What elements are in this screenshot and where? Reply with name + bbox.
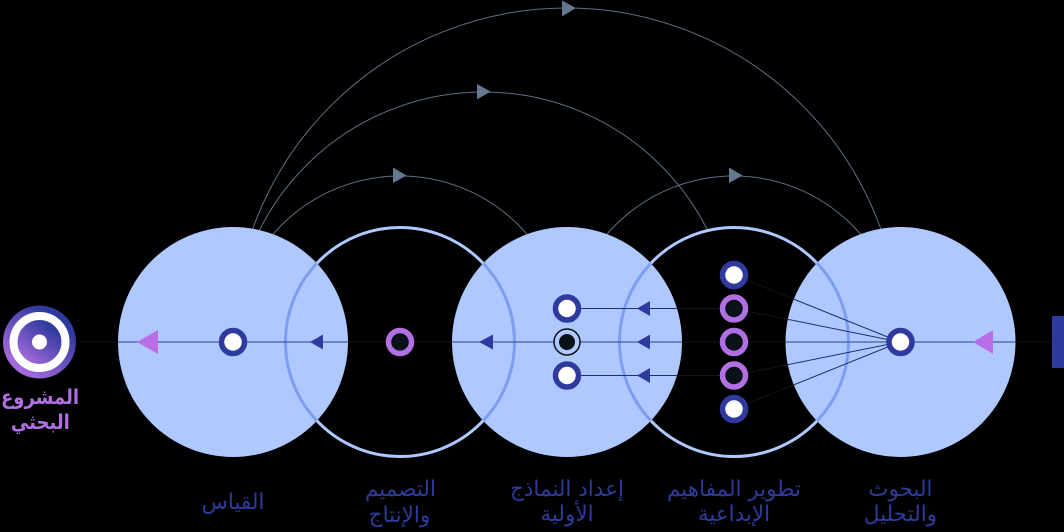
arrow: into design, middle (479, 334, 493, 350)
node: measurement (222, 330, 244, 354)
arrowhead: top arc (562, 0, 576, 16)
label: research and analysis: والتحليل (864, 502, 937, 527)
flow arrows (310, 301, 650, 383)
node: prototype upper (556, 297, 578, 320)
arc: measurement to prototyping (233, 176, 567, 342)
arrowhead: third arc (393, 168, 406, 183)
right end bar (1052, 316, 1064, 368)
icon: research project target (3, 306, 76, 378)
title: research project: البحثي (11, 410, 70, 434)
label: measurement: القياس (202, 490, 264, 515)
label: creative concept development: تطوير المفاهيم (667, 477, 801, 502)
arc: prototyping to research (567, 176, 900, 342)
arrow: upper concept to prototype (637, 301, 650, 316)
node: prototype middle (554, 329, 580, 355)
circle: measurement (118, 227, 348, 457)
label: prototyping: الأولية (540, 500, 594, 527)
node: concept 4 (722, 364, 746, 387)
node: concept 3 (722, 330, 746, 354)
label: design and production: التصميم (365, 477, 436, 502)
arc: measurement to concept development (233, 92, 734, 342)
node: concept 1 (722, 264, 746, 286)
arc: largest, measurement to research (233, 8, 900, 342)
purple arrow: measurement (137, 330, 158, 354)
purple arrow: research (973, 330, 993, 354)
node: prototype lower (556, 364, 578, 387)
label: creative concept development: الإبداعية (698, 502, 770, 527)
arrow: middle concept to prototype (637, 334, 650, 350)
circle: design and production (286, 228, 514, 456)
circle: prototyping (452, 227, 682, 457)
circle: research and analysis (786, 227, 1016, 457)
overlap of outlines inside filled circles (284, 262, 850, 422)
filled stage circles (118, 227, 1016, 457)
feedback arcs (233, 8, 900, 342)
nodes (222, 264, 912, 420)
faint connector lines on black (80, 275, 1052, 409)
label: research and analysis: البحوث (868, 477, 933, 502)
node: concept 2 (722, 297, 746, 320)
arrowhead: fourth arc (729, 168, 742, 183)
node: design (388, 330, 412, 354)
outlined stage circles (286, 228, 848, 456)
title: research project: المشروع (1, 385, 79, 409)
arrow: into measurement (310, 334, 323, 350)
label: design and production: والإنتاج (369, 503, 430, 528)
arrowhead: second arc (477, 84, 490, 100)
connector lines on filled circles (118, 298, 1016, 386)
circle: concept development (620, 228, 848, 456)
arrow: lower concept to prototype (637, 368, 650, 383)
node: concept 5 (722, 398, 746, 420)
label: prototyping: إعداد النماذج (510, 477, 624, 502)
arc arrowheads (393, 0, 742, 183)
node: research (889, 330, 912, 354)
